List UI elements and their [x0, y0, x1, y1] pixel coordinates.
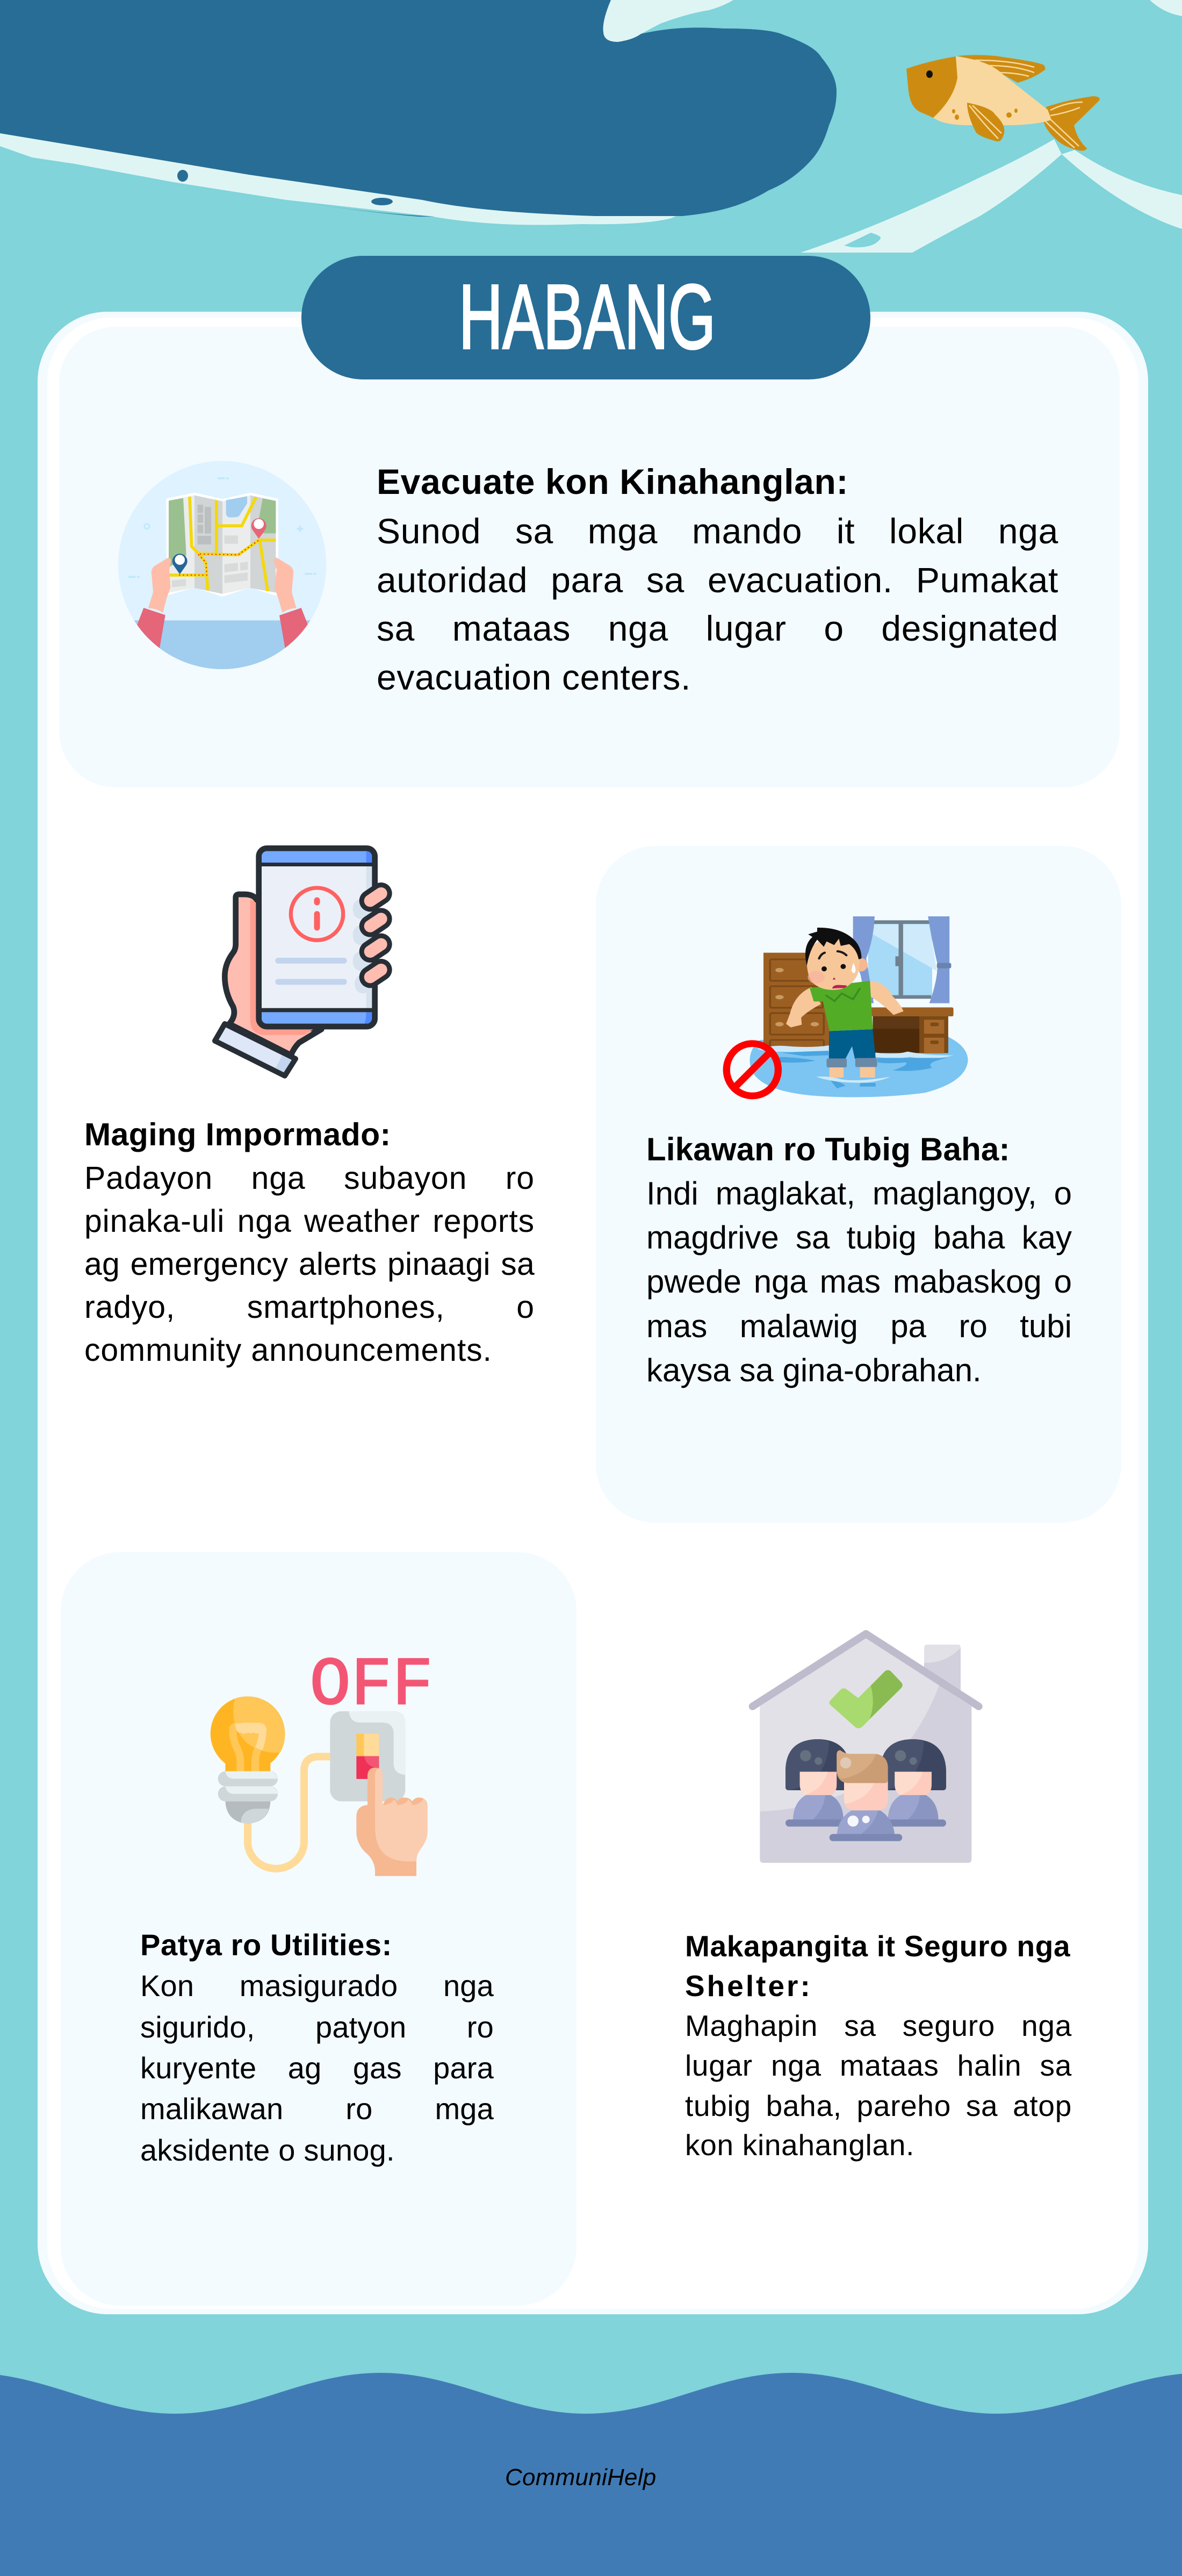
body text [84, 1160, 535, 1368]
text block: evacuate [377, 462, 1058, 697]
head [906, 56, 957, 118]
dorsal fin [957, 55, 1046, 83]
arms [786, 987, 821, 1028]
dark blue blob [0, 0, 837, 216]
off label: OFF [310, 1648, 433, 1725]
body text: ag emergency alerts pinaagi sa [84, 1246, 535, 1282]
boy legs [830, 1065, 844, 1078]
top right corner swoosh [1150, 0, 1182, 16]
pectoral fin [967, 103, 1004, 141]
pointing hand [356, 1768, 428, 1876]
shorts and cuffs [829, 1029, 876, 1059]
body [933, 56, 1051, 125]
text block: maging impormado [84, 1117, 535, 1368]
body text: pinaka-uli nga weather reports [84, 1203, 535, 1239]
panel: likawan [596, 846, 1121, 1523]
body text: sigurido, patyon ro [140, 2010, 494, 2044]
shirt [810, 981, 873, 1031]
body text: aksidente o sunog. [140, 2133, 395, 2167]
panel: patya [61, 1552, 576, 2306]
body text: mas malawig pa ro tubi [646, 1308, 1072, 1344]
body text: tubig baha, pareho sa atop [685, 2089, 1072, 2122]
footer brand text: CommuniHelp [505, 2464, 657, 2491]
check mark [829, 1670, 903, 1728]
body text: autoridad para sa evacuation. Pumakat [377, 560, 1058, 600]
body text: pwede nga mas mabaskog o [646, 1264, 1072, 1300]
dresser [763, 953, 830, 1047]
fish [906, 55, 1100, 150]
footer wave [0, 2373, 1182, 2576]
body text [377, 511, 1058, 697]
body text: Kon masigurado nga [140, 1969, 494, 2003]
icon: hand holding phone [212, 845, 392, 1079]
teal spot in left branch [844, 233, 881, 247]
head [853, 958, 868, 972]
small blue spots in swoosh [177, 170, 435, 217]
icon: light bulb and off switch [211, 1648, 433, 1876]
main card [38, 312, 1148, 2314]
body text: kaysa sa gina-obrahan. [646, 1352, 982, 1388]
heading: Likawan ro Tubig Baha: [646, 1131, 1010, 1167]
panel: evacuate [59, 327, 1120, 787]
icon: map held in hands [118, 461, 327, 669]
body text: kuryente ag gas para [140, 2051, 494, 2085]
water [749, 1036, 968, 1097]
top decoration: blob and swooshes [0, 0, 1182, 253]
body text [140, 1969, 494, 2167]
heading: Makapangita it Seguro nga [685, 1929, 1070, 1963]
body text [685, 2009, 1072, 2162]
scale dots [952, 109, 1018, 120]
body text: sa mataas nga lugar o designated [377, 608, 1058, 648]
body text: Padayon nga subayon ro [84, 1160, 535, 1196]
center person [844, 1779, 888, 1810]
house body [760, 1638, 971, 1863]
heading: Patya ro Utilities: [140, 1928, 392, 1962]
body text: magdrive sa tubig baha kay [646, 1219, 1072, 1255]
wire [248, 1756, 331, 1869]
body text [646, 1175, 1072, 1388]
right swoosh right branch [1062, 150, 1182, 229]
right swoosh left branch [801, 139, 1062, 253]
white swoosh at top of blob [603, 0, 733, 42]
body text: lugar nga mataas halin sa [685, 2049, 1072, 2082]
roof [753, 1634, 979, 1706]
icon: house with people and check mark [749, 1630, 983, 1863]
prohibition sign [726, 1044, 778, 1096]
eye [926, 70, 933, 78]
window and curtains [868, 921, 932, 998]
text block: patya ro utilities [140, 1928, 494, 2167]
right person [881, 1739, 946, 1790]
text block: likawan ro tubig baha [646, 1131, 1072, 1388]
white inner card [47, 318, 1138, 2309]
text block: makapangita it seguro nga shelter [685, 1929, 1072, 2162]
title pill [301, 256, 870, 379]
heading [685, 1929, 1070, 2003]
title pill: HABANG [459, 266, 716, 368]
body text: evacuation centers. [377, 657, 691, 697]
heading: Maging Impormado: [84, 1117, 391, 1152]
water surface [757, 1045, 830, 1052]
heading: Shelter: [685, 1969, 812, 2003]
body text: malikawan ro mga [140, 2092, 494, 2126]
body text: community announcements. [84, 1332, 492, 1368]
left person [785, 1739, 851, 1790]
desk [873, 1016, 948, 1053]
chimney [924, 1645, 961, 1695]
lower white swoosh [0, 129, 685, 225]
bulb [211, 1696, 285, 1771]
body text: Maghapin sa seguro nga [685, 2009, 1072, 2042]
body text: Indi maglakat, maglangoy, o [646, 1175, 1072, 1211]
body text: radyo, smartphones, o [84, 1289, 535, 1325]
icon: boy standing in flood water with prohibition sign [723, 916, 968, 1100]
switch plate [330, 1711, 405, 1802]
body text: Sunod sa mga mando it lokal nga [377, 511, 1058, 551]
tail [1044, 96, 1100, 150]
body text: kon kinahanglan. [685, 2128, 914, 2162]
heading: Evacuate kon Kinahanglan: [377, 462, 848, 501]
base [218, 1771, 278, 1786]
